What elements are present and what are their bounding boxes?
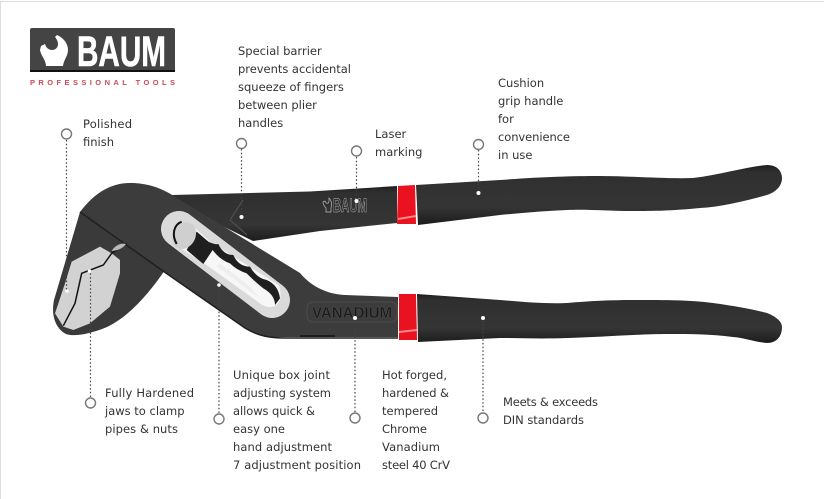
- icon: wrench: [40, 35, 68, 66]
- red collar lower: [399, 294, 417, 340]
- callout: special barrier: between plier: [238, 98, 317, 112]
- callout: cushion grip: in use: [498, 148, 532, 162]
- callout: polished finish: Polished: [83, 117, 132, 131]
- polished jaws: [55, 243, 127, 330]
- callout: fully hardened jaws: pipes & nuts: [105, 422, 178, 436]
- callout: fully hardened jaws: jaws to clamp: [104, 404, 185, 418]
- callout: laser marking: marking: [375, 145, 422, 159]
- adjustment teeth: [187, 232, 280, 305]
- callout: polished finish: finish: [83, 135, 114, 149]
- callout: special barrier: Special barrier: [238, 44, 322, 58]
- callout: hot forged: Hot forged,: [382, 368, 447, 382]
- pliers illustration: VANADIUM: [312, 305, 392, 322]
- callout: box joint: Unique box joint: [233, 368, 330, 382]
- stamped marking on lower arm: [307, 302, 397, 322]
- callout: box joint: allows quick &: [233, 404, 315, 418]
- red collar upper: [397, 185, 416, 224]
- callout: laser marking: Laser: [375, 127, 407, 141]
- callout: hot forged: Chrome: [382, 422, 427, 436]
- laser marking on upper arm: BAUM: [333, 196, 367, 217]
- callout: DIN standards: DIN standards: [503, 413, 584, 427]
- lower cushion grip handle: [417, 294, 782, 343]
- callout: special barrier: squeeze of fingers: [238, 80, 344, 94]
- callout: fully hardened jaws: Fully Hardened: [105, 386, 194, 400]
- tagline: PROFESSIONAL TOOLS: [30, 78, 175, 87]
- brand name: BAUM: [77, 28, 166, 76]
- callout: hot forged: Vanadium: [382, 440, 440, 454]
- callout: box joint: adjusting system: [233, 386, 331, 400]
- callout: fully hardened jaws: [86, 269, 194, 436]
- laser marking on upper arm: [323, 196, 367, 217]
- callout: cushion grip: convenience: [498, 130, 570, 144]
- logo: BAUM Professional Tools: [30, 28, 175, 87]
- callout: hot forged: steel 40 CrV: [382, 458, 450, 472]
- callout: box joint: [214, 283, 361, 472]
- callout: DIN standards: Meets & exceeds: [503, 395, 598, 409]
- pliers illustration: [53, 165, 782, 343]
- callout: polished finish: [62, 117, 132, 293]
- callout: special barrier: prevents accidental: [238, 62, 351, 76]
- callout: DIN standards: [478, 316, 598, 427]
- callout: cushion grip: [474, 76, 570, 195]
- callout: cushion grip: grip handle: [498, 94, 563, 108]
- callout: special barrier: [236, 44, 351, 219]
- callout: special barrier: handles: [238, 116, 283, 130]
- callout: hot forged: [350, 316, 450, 472]
- box joint slot: [167, 218, 281, 307]
- upper cushion grip handle: [416, 165, 782, 225]
- callout: box joint: hand adjustment: [233, 440, 332, 454]
- callout: hot forged: hardened &: [382, 386, 449, 400]
- lower arm with head: [80, 183, 398, 337]
- callout: box joint: easy one: [233, 422, 285, 436]
- callout: hot forged: tempered: [382, 404, 438, 418]
- callout: laser marking: [352, 127, 422, 203]
- pivot bolt: [167, 218, 201, 253]
- upper arm: [172, 186, 397, 241]
- callout: cushion grip: Cushion: [498, 76, 544, 90]
- callout: box joint: 7 adjustment position: [233, 458, 361, 472]
- lower jaw: [53, 200, 180, 335]
- callout: cushion grip: for: [498, 112, 514, 126]
